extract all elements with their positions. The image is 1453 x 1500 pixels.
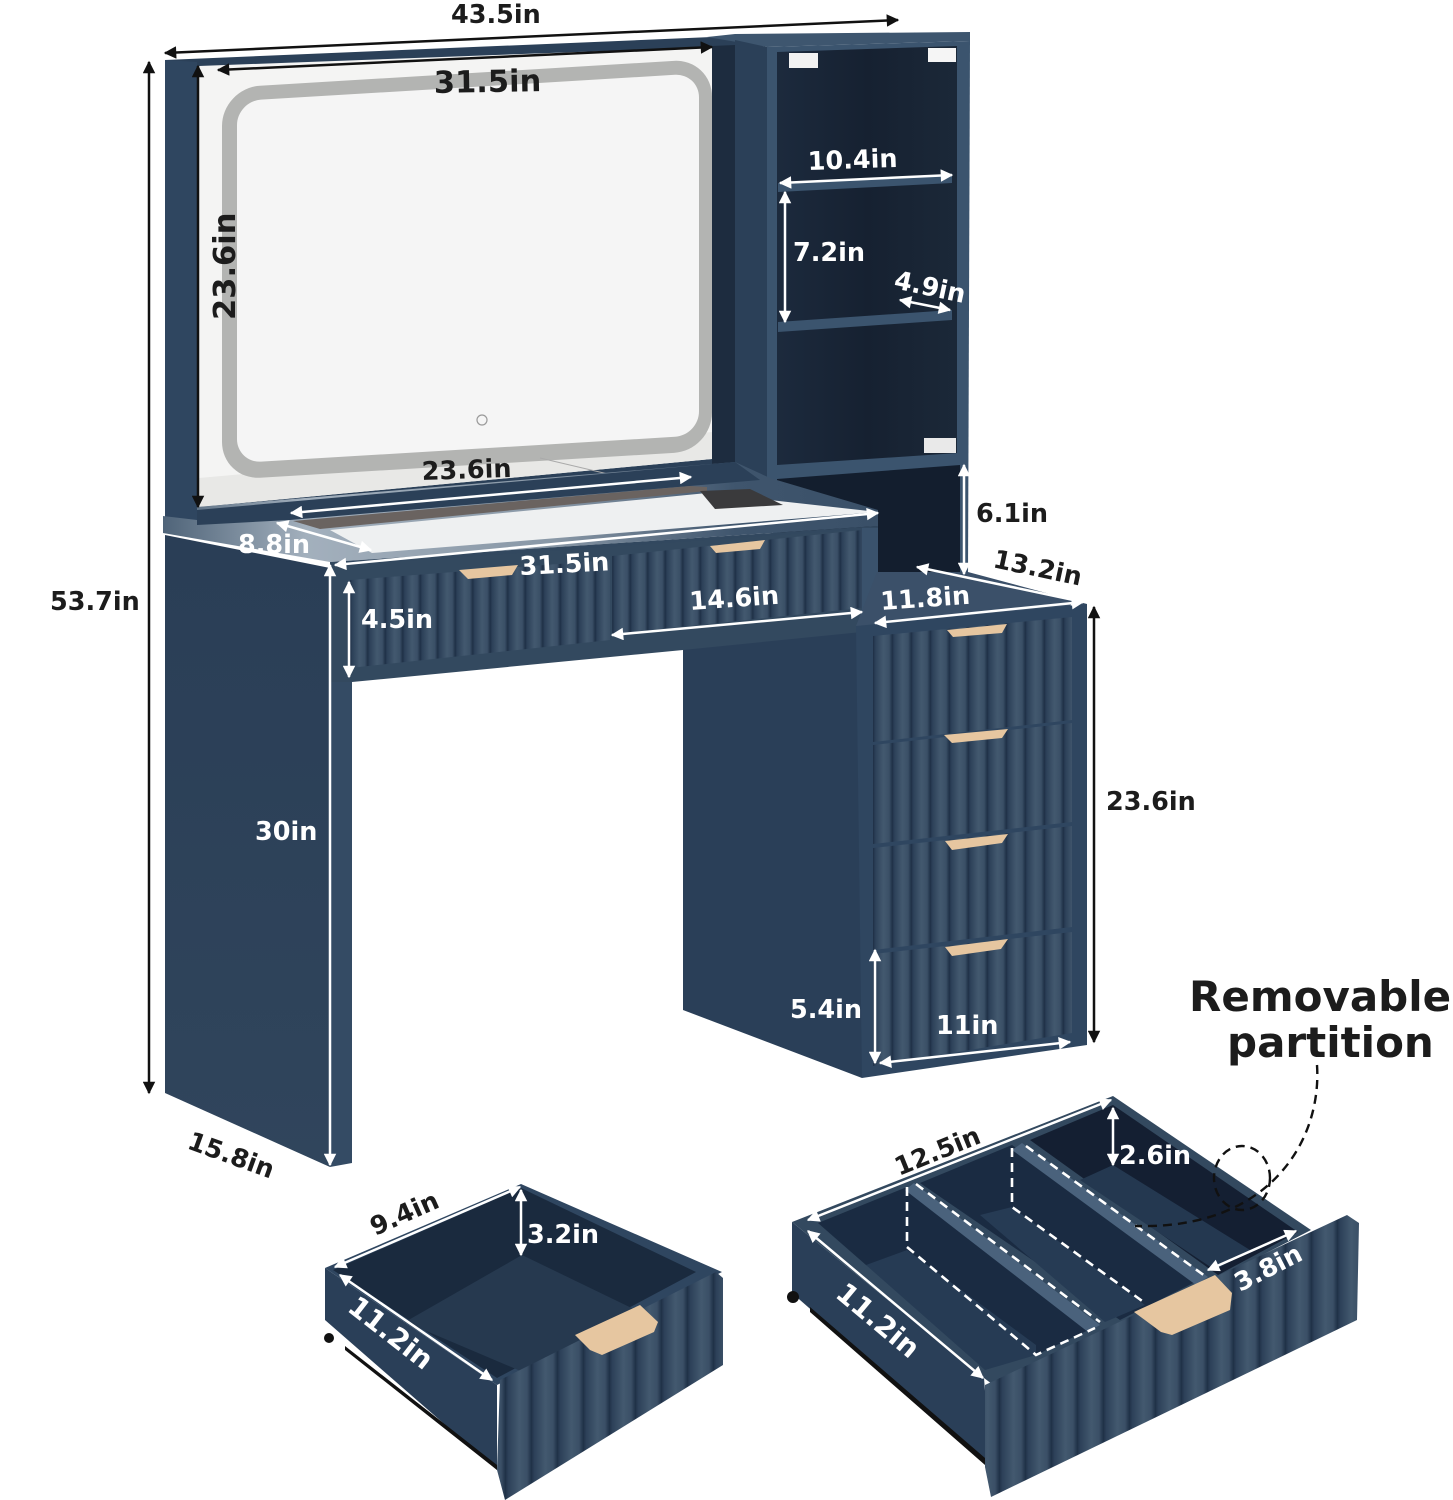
dimension labels: 14.6in	[688, 581, 780, 617]
dimension labels: 53.7in	[50, 587, 140, 617]
dimension labels: 11.2in	[342, 1290, 440, 1376]
handle	[1134, 1275, 1232, 1335]
dimension labels: 3.2in	[527, 1220, 599, 1250]
desk handles	[459, 540, 765, 579]
callout leader: removable partition	[1135, 1065, 1317, 1226]
LED ring	[222, 59, 712, 480]
vanity desk	[163, 32, 1087, 1167]
touch button	[477, 415, 487, 425]
compartment 1	[818, 1187, 1099, 1355]
mirror	[199, 47, 712, 507]
shelves	[778, 175, 952, 192]
callout: removable partition	[1189, 972, 1451, 1067]
desk top	[163, 462, 878, 582]
pedestal handles	[944, 624, 1008, 956]
dimension labels: 23.6in	[1106, 787, 1196, 817]
open niche	[777, 465, 960, 575]
dimension labels: 11in	[936, 1011, 998, 1041]
left drawer	[324, 1184, 723, 1500]
hinges	[789, 53, 818, 68]
right pedestal side	[683, 622, 862, 1078]
dimension labels: 23.6in	[421, 454, 512, 487]
dimension labels: 8.8in	[238, 530, 310, 560]
dimension labels: 6.1in	[976, 499, 1048, 529]
left leg	[165, 535, 352, 1167]
dimension labels: 2.6in	[1119, 1141, 1191, 1171]
wheel and rail	[787, 1291, 799, 1303]
partition dashes	[907, 1146, 1205, 1355]
front panel	[985, 1215, 1359, 1497]
dimension labels: 3.8in	[1230, 1239, 1307, 1298]
dimension labels: 12.5in	[890, 1121, 985, 1182]
pedestal drawers	[873, 617, 1072, 1066]
dimension labels: 7.2in	[793, 238, 865, 268]
glass door	[777, 46, 957, 467]
dividers	[905, 1183, 1100, 1332]
desk drawer left	[350, 560, 610, 668]
dimension labels: 9.4in	[366, 1186, 444, 1242]
dimension labels: 30in	[255, 817, 317, 847]
right drawer	[787, 1096, 1359, 1497]
dimension labels: 43.5in	[451, 0, 541, 30]
dimension labels: 11.8in	[879, 581, 971, 617]
dimension arrows	[149, 20, 1296, 1380]
dimension labels: 23.6in	[208, 213, 243, 320]
glass cabinet	[707, 32, 970, 575]
dimension labels: 15.8in	[184, 1126, 278, 1185]
dimension labels: 31.5in	[434, 64, 542, 101]
dimension labels: 4.5in	[361, 605, 433, 635]
dimension labels: 13.2in	[991, 545, 1085, 593]
dark glass insert	[700, 489, 783, 509]
wheel	[324, 1333, 334, 1343]
compartment 2	[920, 1145, 1205, 1320]
dimension labels: 4.9in	[892, 266, 968, 310]
mirror frame	[165, 37, 736, 525]
desk drawer right	[612, 530, 862, 634]
dimension labels: 31.5in	[519, 547, 610, 582]
dimension labels: 5.4in	[790, 995, 862, 1025]
callout: removable partition: Removable	[1189, 972, 1451, 1021]
dimension labels: 10.4in	[807, 144, 898, 177]
dimension labels: 11.2in	[830, 1276, 926, 1365]
handle	[575, 1305, 658, 1355]
pedestal	[856, 572, 1087, 1078]
desk apron	[330, 528, 878, 682]
callout: removable partition: partition	[1227, 1018, 1434, 1067]
dimension labels	[50, 0, 1307, 1376]
compartment 3	[1030, 1105, 1298, 1275]
